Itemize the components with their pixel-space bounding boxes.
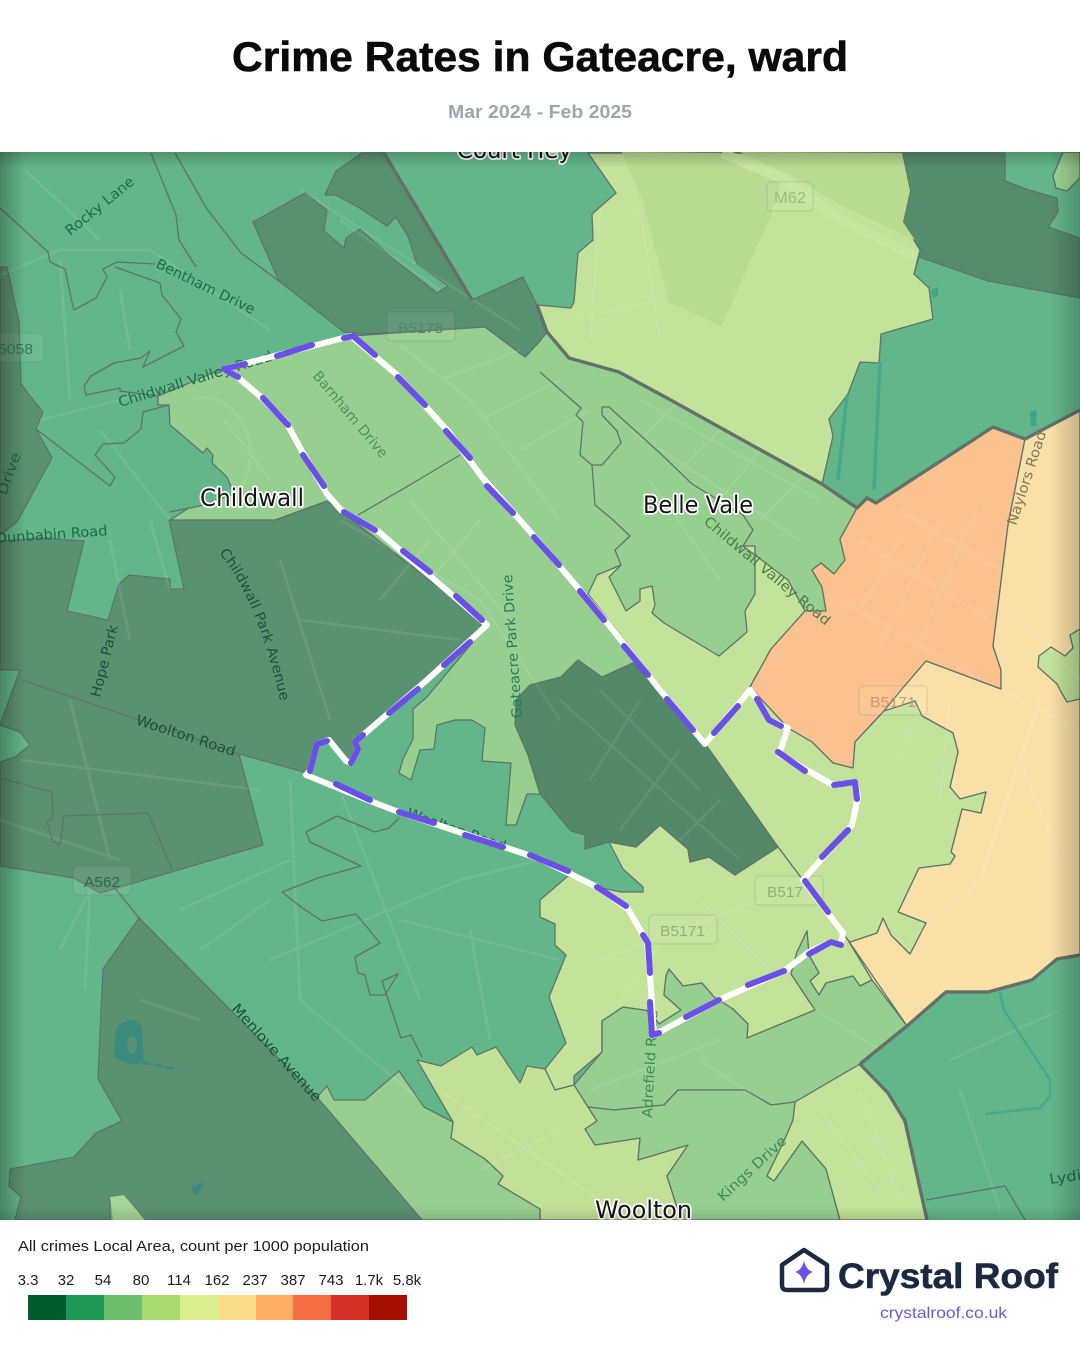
area: Woolton yellow-green <box>417 1047 688 1220</box>
legend scale labels: 1.7k <box>355 1272 384 1289</box>
area: darker farmland shade west <box>622 152 781 326</box>
subtitle: date range: Mar 2024 - Feb 2025 <box>448 102 632 122</box>
place label: Belle Vale: Belle Vale <box>643 491 753 519</box>
area: south ward yellow-green <box>540 825 872 1090</box>
legend scale labels <box>18 1272 422 1289</box>
icon: house with star <box>782 1250 827 1290</box>
area: south light green <box>574 931 907 1110</box>
road label: Adrefield Road: Adrefield Road <box>640 1010 662 1118</box>
area: north-east yellow-green <box>537 153 933 484</box>
area: west dark green <box>0 267 487 893</box>
legend scale labels: 237 <box>242 1272 268 1289</box>
ponds right <box>931 287 1037 426</box>
legend scale labels: 80 <box>133 1272 149 1289</box>
area: north-west dark green <box>253 153 547 357</box>
road shield: B5171 east: B5171 <box>870 694 916 711</box>
road shield: B5171 centre: B517 <box>767 884 803 901</box>
map base: mid-green areas <box>0 152 1080 1220</box>
area: orange high-crime zone <box>750 427 1025 768</box>
place label: Woolton: Woolton <box>595 1196 692 1224</box>
road label: Childwall Valley Road west: Childwall Valley Road <box>116 349 274 411</box>
area: top-right dark green <box>902 153 1080 298</box>
area: south-west dark green <box>9 918 422 1220</box>
road label: Gateacre Park Drive: Gateacre Park Drive <box>500 574 526 719</box>
road shield: B5171 south <box>649 915 717 944</box>
stream south-east <box>985 992 1050 1114</box>
street network <box>0 170 1080 1210</box>
ward outline white <box>224 336 858 1035</box>
road label: Childwall Park Avenue: Childwall Park Avenue <box>221 549 288 700</box>
area: right-edge yellow-green patch <box>1038 629 1080 702</box>
small pond <box>192 1182 205 1194</box>
road shield: A562 <box>73 866 131 895</box>
area: cream zone east <box>848 410 1080 1026</box>
road label: Woolton Road west: Woolton Road <box>134 713 238 760</box>
legend scale labels: 32 <box>58 1272 74 1289</box>
place label: Childwall: Childwall <box>200 484 304 512</box>
legend <box>18 1238 422 1320</box>
legend scale labels: 114 <box>167 1272 191 1289</box>
road label: Woolton Road centre: Woolton Road <box>405 806 508 855</box>
road label: Kings Drive: Kings Drive <box>715 1133 790 1205</box>
area: east ward yellow-green <box>706 687 986 954</box>
road shield: B5171 centre <box>755 876 823 905</box>
Crystal Roof logo <box>782 1250 1058 1322</box>
water features <box>114 287 1050 1194</box>
stream <box>142 1062 178 1070</box>
area: south-west light green <box>317 1071 540 1220</box>
road shield: A562: A562 <box>84 874 120 891</box>
ward boundary: Gateacre <box>224 336 858 1035</box>
road label: Bentham Drive: Bentham Drive <box>153 256 257 318</box>
road shield: M62: M62 <box>774 190 806 207</box>
pond islet <box>127 1036 137 1054</box>
area: small light patch south-west <box>110 1195 145 1220</box>
road label: Barnham Drive: Barnham Drive <box>309 368 391 461</box>
area boundary lines <box>0 153 1025 1220</box>
logo wordmark: Crystal Roof <box>838 1257 1058 1296</box>
title: Crime Rates in Gateacre, ward <box>232 33 848 80</box>
map edge vignette <box>0 152 1080 1220</box>
road label: Childwall Valley Road east: Childwall Valley Road <box>700 514 833 629</box>
legend scale labels: 162 <box>204 1272 230 1289</box>
area: south-east yellow-green <box>767 1064 927 1220</box>
road label: Naylors Road: Naylors Road <box>1005 429 1050 527</box>
area: darker farmland shade north <box>740 152 915 240</box>
legend scale labels: 54 <box>95 1272 111 1289</box>
road label: Menlove Avenue: Menlove Avenue <box>228 1001 324 1105</box>
website url: crystalroof.co.uk <box>880 1305 1008 1322</box>
area: central ward light green <box>158 327 857 825</box>
road shield: 5058 <box>0 333 44 362</box>
road shield: B5178 <box>387 312 455 341</box>
road shield: B5178: B5178 <box>398 320 443 337</box>
legend scale labels: 5.8k <box>393 1272 422 1289</box>
road label: Rocky Lane: Rocky Lane <box>62 174 138 239</box>
area: top-right light patch <box>1053 152 1080 191</box>
legend scale labels: 387 <box>280 1272 306 1289</box>
road shield: M62 <box>767 182 813 211</box>
pond <box>114 1020 144 1064</box>
drains <box>838 362 880 490</box>
legend title: All crimes Local Area, count per 1000 population <box>18 1238 369 1255</box>
place label: Court Hey: Court Hey <box>457 136 572 164</box>
road shield: B5171 south: B5171 <box>660 923 705 940</box>
area: north yellow-green wedge <box>588 546 805 745</box>
legend colour bar <box>28 1295 407 1320</box>
road shield: B5171 east <box>859 686 927 715</box>
road label: Lydiate: Lydi <box>1048 1168 1080 1188</box>
ward dashes purple <box>224 336 857 1035</box>
road label: Hope Park: Hope Park <box>88 622 122 699</box>
legend scale labels: 3.3 <box>18 1272 38 1289</box>
legend scale labels: 743 <box>318 1272 344 1289</box>
M62 road stripe <box>720 152 781 183</box>
area: central dark green block <box>515 660 778 875</box>
area: Kings Drive light green <box>585 1090 840 1220</box>
thick boundary lines <box>384 153 1080 1220</box>
